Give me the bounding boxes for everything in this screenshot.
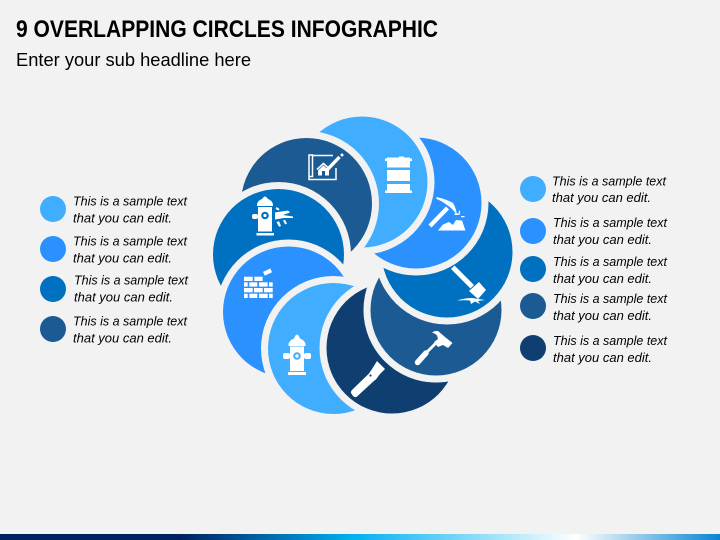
legend item 7: that you can edit. bbox=[553, 272, 652, 286]
overlapping circles diagram bbox=[206, 110, 520, 421]
legend item 1: This is a sample text bbox=[73, 194, 188, 208]
subtitle: Enter your sub headline here bbox=[16, 49, 251, 70]
right legend bbox=[520, 174, 668, 365]
legend item 7: This is a sample text bbox=[553, 255, 668, 269]
legend item 3: This is a sample text bbox=[74, 274, 189, 288]
legend item 6 bbox=[520, 216, 668, 247]
legend item 1 bbox=[40, 194, 188, 226]
legend item 9 bbox=[520, 334, 668, 365]
legend item 5 bbox=[520, 174, 667, 205]
legend item 6: that you can edit. bbox=[553, 233, 652, 247]
icon: oil barrel bbox=[385, 156, 412, 193]
icon: fire hydrant bbox=[283, 334, 311, 375]
icon: flashlight bbox=[351, 361, 385, 397]
legend item 4: This is a sample text bbox=[73, 314, 188, 328]
icon: pickaxe and rocks bbox=[428, 197, 466, 230]
legend item 3 bbox=[40, 274, 189, 304]
legend item 8: This is a sample text bbox=[553, 292, 668, 306]
footer gradient bar bbox=[0, 534, 720, 540]
circle: light blue barrel bbox=[290, 110, 434, 254]
title: 9 OVERLAPPING CIRCLES INFOGRAPHIC bbox=[16, 16, 438, 43]
legend item 9: This is a sample text bbox=[553, 334, 668, 348]
legend item 4: that you can edit. bbox=[73, 332, 172, 346]
circle: mid blue leaking hydrant bbox=[206, 182, 351, 327]
legend item 9: that you can edit. bbox=[553, 351, 652, 365]
legend item 5: that you can edit. bbox=[552, 191, 651, 205]
left legend bbox=[40, 194, 189, 346]
legend item 1: that you can edit. bbox=[73, 212, 172, 226]
icon: leaking hydrant bbox=[252, 196, 293, 236]
circle: blue bricks bbox=[216, 240, 361, 384]
circle: light blue hydrant bbox=[261, 276, 406, 421]
legend item 6: This is a sample text bbox=[553, 216, 668, 230]
legend item 4 bbox=[40, 314, 188, 346]
legend item 8 bbox=[520, 292, 668, 323]
circle: blue pickaxe bbox=[344, 130, 488, 276]
legend item 7 bbox=[520, 255, 668, 286]
legend item 5: This is a sample text bbox=[552, 174, 667, 188]
icon: sledgehammer bbox=[451, 266, 486, 304]
legend item 2 bbox=[40, 234, 188, 266]
circle: navy flashlight bbox=[320, 286, 448, 414]
circle: mid blue sledgehammer bbox=[374, 180, 520, 324]
legend item 3: that you can edit. bbox=[74, 290, 173, 304]
legend item 2: that you can edit. bbox=[73, 252, 172, 266]
icon: blueprint house bbox=[309, 154, 344, 180]
circle: dark blue blueprint bbox=[234, 131, 379, 276]
legend item 8: that you can edit. bbox=[553, 309, 652, 323]
circle: dark blue hammer bbox=[364, 277, 502, 382]
icon: brick wall bbox=[244, 268, 273, 298]
legend item 2: This is a sample text bbox=[73, 234, 188, 248]
icon: claw hammer bbox=[418, 331, 452, 362]
